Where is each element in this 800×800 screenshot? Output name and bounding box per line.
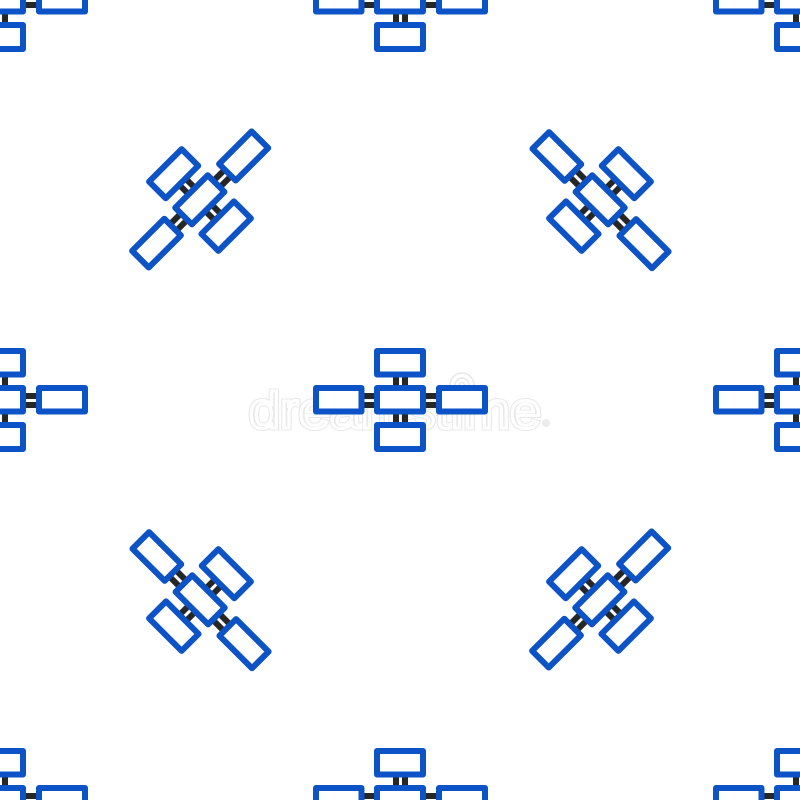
watermark: dreamstime: [249, 382, 541, 439]
icon: satellite top-right corner: [716, 0, 800, 49]
icon: satellite top-center: [316, 0, 485, 49]
icon: satellite middle-left: [0, 351, 85, 449]
icon: satellite lower-right diagonal: [506, 505, 695, 694]
icon: satellite bottom-left corner: [0, 751, 85, 800]
icon: satellite center: [316, 351, 485, 449]
icon: satellite upper-right diagonal: [506, 106, 695, 295]
icon: satellite lower-left diagonal: [106, 506, 295, 695]
icon: satellite bottom-right corner: [716, 751, 800, 800]
icon: satellite upper-left diagonal: [106, 105, 295, 294]
watermark: dreamstime: [249, 382, 541, 439]
icon: satellite middle-right: [716, 351, 800, 449]
icon: satellite top-left corner: [0, 0, 85, 49]
icon: satellite bottom-center: [316, 751, 485, 800]
